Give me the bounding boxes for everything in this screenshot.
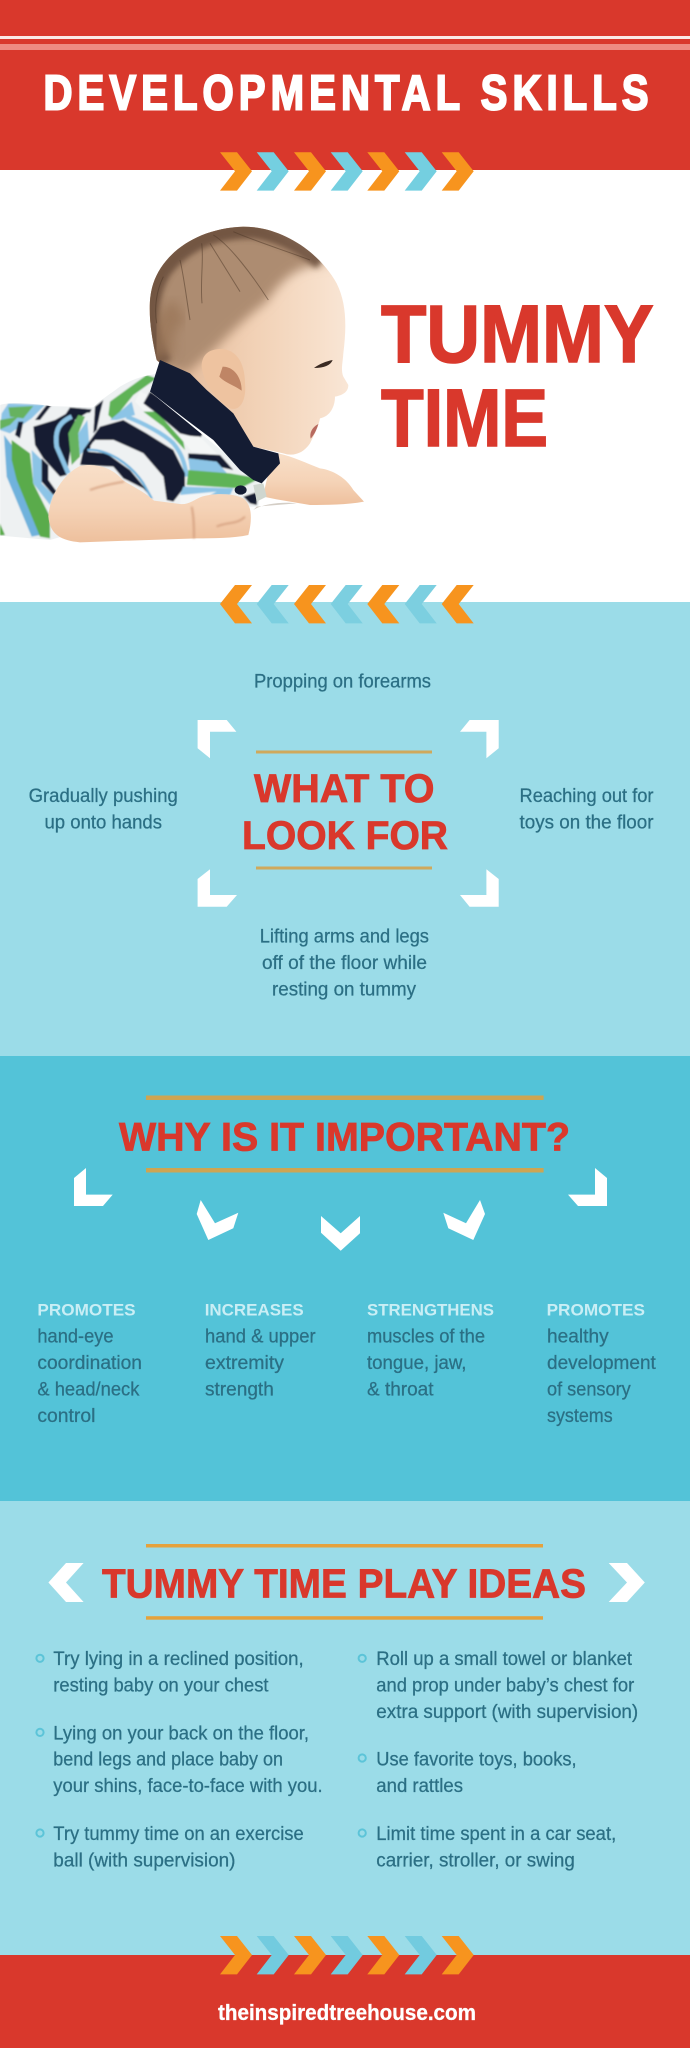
footer url: theinspiredtreehouse.com (218, 2000, 476, 2025)
panel: footer (0, 1955, 690, 2048)
chevron band: middle (220, 585, 474, 623)
heading: what to look for (242, 767, 448, 858)
bullet: towel: and prop under baby’s chest for (376, 1676, 635, 1696)
bullet: towel: Roll up a small towel or blanket (376, 1649, 633, 1670)
bullet: favorite toys: Use favorite toys, books, (376, 1750, 577, 1771)
bullet: limit time (359, 1824, 616, 1871)
illustration: baby on tummy (0, 217, 364, 543)
column: strengthens (367, 1301, 494, 1401)
panel: tummy time play ideas (0, 1501, 690, 1955)
text: reaching out: Reaching out for (520, 786, 654, 807)
bullet: back on floor: your shins, face-to-face with you. (53, 1776, 323, 1797)
head (150, 227, 348, 455)
chevron band: top (220, 152, 474, 191)
heading: what to look for: WHAT TO (254, 767, 434, 811)
text: propping on forearms: Propping on forearms (254, 672, 431, 692)
panel: why is it important (0, 1056, 690, 1501)
text: lifting arms and legs (260, 926, 429, 1001)
column: increases: extremity (205, 1353, 285, 1374)
bullet: towel (359, 1649, 638, 1723)
panel background (0, 602, 690, 1056)
chevron band: bottom (220, 1936, 474, 1974)
head and far arm (143, 217, 364, 505)
hair (143, 217, 328, 373)
heading: tummy time: TIME (381, 373, 548, 464)
column: promotes sensory: of sensory (547, 1380, 631, 1401)
bullet: exercise ball: Try tummy time on an exercise (53, 1824, 304, 1845)
column: promotes sensory (547, 1301, 657, 1427)
column: strengthens: & throat (367, 1380, 434, 1401)
arm creases (90, 482, 245, 538)
rules (146, 1096, 544, 1172)
heading: tummy time (381, 289, 654, 464)
text: lifting arms and legs: resting on tummy (272, 980, 416, 1001)
column: strengthens: tongue, jaw, (367, 1353, 466, 1374)
heading: why is it important: WHY IS IT IMPORTANT? (119, 1116, 570, 1160)
column: promotes sensory: PROMOTES (547, 1301, 645, 1320)
bullet: reclined position: Try lying in a reclined position, (53, 1649, 304, 1670)
bullet: favorite toys: and rattles (376, 1776, 463, 1797)
placket (253, 483, 267, 502)
bullet: towel: extra support (with supervision) (376, 1702, 638, 1723)
shirt, collar and near arm (0, 349, 297, 543)
text: gradually pushing up: up onto hands (44, 813, 162, 834)
panel: what to look for (0, 585, 690, 1056)
bullet: exercise ball (36, 1824, 304, 1871)
column: increases (205, 1301, 316, 1401)
ear (202, 349, 245, 409)
arrow: right (609, 1563, 645, 1602)
bullet: favorite toys (359, 1750, 577, 1797)
panel: header banner (0, 0, 690, 170)
column: promotes hand-eye: & head/neck (37, 1380, 140, 1401)
bullet: back on floor: bend legs and place baby on (53, 1750, 283, 1771)
mouth (310, 424, 318, 439)
column: promotes hand-eye: PROMOTES (37, 1301, 136, 1320)
column: promotes hand-eye (37, 1301, 142, 1427)
arrow: left (48, 1563, 84, 1602)
background: white hero (0, 170, 690, 602)
text: gradually pushing up: Gradually pushing (29, 786, 178, 807)
heading: play ideas: TUMMY TIME PLAY IDEAS (102, 1561, 586, 1607)
rules (256, 750, 432, 870)
column: increases: hand & upper (205, 1326, 316, 1347)
bullet: limit time: Limit time spent in a car seat, (376, 1824, 616, 1845)
column: promotes sensory: systems (547, 1406, 613, 1427)
column: promotes sensory: development (547, 1353, 657, 1374)
column: promotes hand-eye: coordination (37, 1353, 142, 1374)
column: increases: INCREASES (205, 1301, 304, 1320)
button (235, 485, 247, 495)
text: gradually pushing up (29, 786, 178, 834)
heading: tummy time: TUMMY (381, 289, 654, 380)
eye (314, 360, 333, 368)
column: strengthens: STRENGTHENS (367, 1301, 494, 1320)
floor crease (253, 503, 297, 510)
text: lifting arms and legs: off of the floor while (262, 953, 427, 974)
heading: what to look for: LOOK FOR (242, 814, 448, 858)
near arm (48, 465, 251, 542)
bullet: back on floor: Lying on your back on the floor, (53, 1723, 309, 1744)
panel background (0, 1501, 690, 1955)
shirt stripes (0, 370, 267, 543)
bullet: limit time: carrier, stroller, or swing (376, 1850, 575, 1871)
column: increases: strength (205, 1380, 274, 1401)
bullet: reclined position (36, 1649, 304, 1696)
collar (150, 360, 280, 483)
panel background (0, 1056, 690, 1501)
title: DEVELOPMENTAL SKILLS (43, 66, 649, 120)
column: strengthens: muscles of the (367, 1326, 485, 1347)
column: promotes sensory: healthy (547, 1326, 609, 1347)
text: lifting arms and legs: Lifting arms and legs (260, 926, 429, 947)
bullet: exercise ball: ball (with supervision) (53, 1850, 235, 1871)
text: reaching out: toys on the floor (520, 813, 654, 834)
corner brackets (198, 720, 499, 907)
bullet: back on floor (36, 1723, 323, 1797)
rules (146, 1544, 543, 1620)
text: reaching out (520, 786, 654, 834)
column: promotes hand-eye: control (37, 1406, 95, 1427)
arrows fanning out (74, 1168, 607, 1251)
column: promotes hand-eye: hand-eye (37, 1326, 114, 1347)
far arm (263, 453, 364, 505)
bullet: reclined position: resting baby on your chest (53, 1676, 269, 1696)
